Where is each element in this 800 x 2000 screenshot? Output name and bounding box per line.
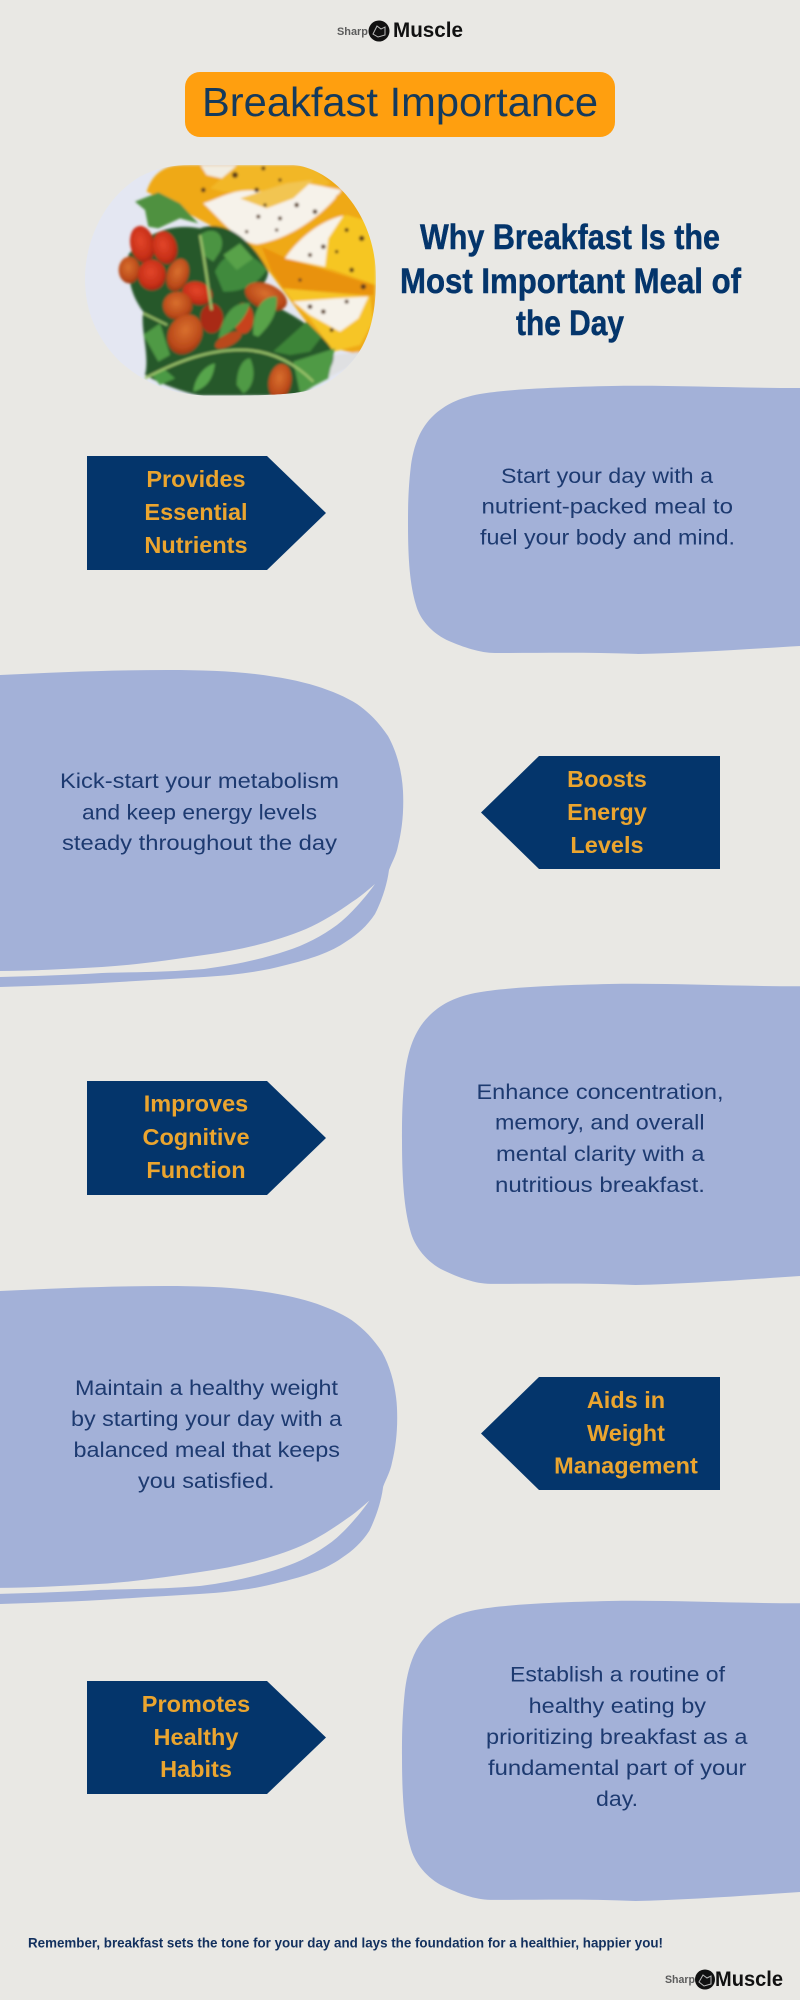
panel: improves cognitive function text: mental clarity with a xyxy=(496,1143,705,1166)
arrow: aids in weight management: Aids in xyxy=(587,1387,665,1413)
panel: aids in weight management text: by starting your day with a xyxy=(71,1408,342,1431)
panel: aids in weight management text: you satisfied. xyxy=(138,1470,274,1493)
arrow: promotes healthy habits: Healthy xyxy=(154,1724,238,1750)
panel: boosts energy levels text: steady throughout the day xyxy=(62,832,338,855)
arrow: provides essential nutrients: Nutrients xyxy=(144,532,248,558)
arrow: improves cognitive function: Improves xyxy=(144,1090,248,1116)
arugula stem xyxy=(145,350,313,382)
panel: boosts energy levels text: and keep energy levels xyxy=(82,802,317,824)
photo: breakfast plate with eggs and salad xyxy=(85,165,376,396)
heading: why breakfast: Why Breakfast Is the xyxy=(420,218,720,257)
logo: top SharpMuscle xyxy=(337,19,463,42)
panel: improves cognitive function text: memory, and overall xyxy=(495,1112,704,1135)
arrow: boosts energy levels: Energy xyxy=(567,799,647,825)
arrow: promotes healthy habits: Habits xyxy=(160,1756,232,1782)
logo: bottom SharpMuscle: Sharp xyxy=(665,1974,695,1986)
logo: top SharpMuscle: Sharp xyxy=(337,26,368,38)
panel: boosts energy levels text: Kick-start your metabolism xyxy=(60,770,339,793)
arrow: aids in weight management: Weight xyxy=(587,1420,665,1446)
arrow: aids in weight management: Management xyxy=(554,1452,698,1478)
logo: top SharpMuscle: Muscle xyxy=(393,19,463,42)
panel: aids in weight management text: balanced meal that keeps xyxy=(74,1439,340,1462)
panel: promotes healthy habits text: Establish a routine of xyxy=(510,1664,725,1687)
panel: promotes healthy habits text xyxy=(402,1601,800,1901)
footer text: Remember, breakfast sets the tone for your day and lays the foundation for a healthier, happier you! xyxy=(28,1934,663,1950)
heading: why breakfast: Most Important Meal of xyxy=(400,262,741,301)
tomatoes xyxy=(128,224,156,264)
arrow: improves cognitive function: Cognitive xyxy=(142,1124,250,1150)
logo: bottom SharpMuscle xyxy=(665,1968,783,1991)
panel: promotes healthy habits text: prioritizing breakfast as a xyxy=(486,1726,748,1749)
arrow: promotes healthy habits xyxy=(87,1681,326,1794)
panel: aids in weight management text: Maintain a healthy weight xyxy=(75,1377,338,1400)
panel: improves cognitive function text: nutritious breakfast. xyxy=(495,1174,705,1197)
panel: provides essential nutrients text: Start your day with a xyxy=(501,465,713,488)
arrow: improves cognitive function: Function xyxy=(146,1157,246,1183)
logo: bottom SharpMuscle: Muscle xyxy=(715,1968,783,1991)
panel: improves cognitive function text: Enhance concentration, xyxy=(476,1081,724,1104)
arrow: promotes healthy habits: Promotes xyxy=(142,1691,250,1717)
pepper specks xyxy=(201,166,366,332)
heading: why breakfast xyxy=(400,218,741,343)
panel: promotes healthy habits text: day. xyxy=(596,1788,638,1811)
greens xyxy=(128,226,334,396)
panel: provides essential nutrients text: fuel your body and mind. xyxy=(480,526,735,550)
arrow: provides essential nutrients xyxy=(87,456,326,570)
arrow: aids in weight management xyxy=(481,1377,720,1490)
arrow: improves cognitive function xyxy=(87,1081,326,1195)
panel: boosts energy levels text xyxy=(0,670,403,987)
panel: promotes healthy habits text: fundamental part of your xyxy=(488,1757,747,1780)
panel: provides essential nutrients text: nutrient-packed meal to xyxy=(482,496,733,518)
arrow: boosts energy levels: Levels xyxy=(570,832,644,858)
leaves over tomatoes xyxy=(253,297,277,337)
panel: promotes healthy habits text: healthy eating by xyxy=(529,1695,707,1718)
arrow: provides essential nutrients: Provides xyxy=(146,466,246,492)
panel: aids in weight management text xyxy=(0,1286,397,1604)
heading: why breakfast: the Day xyxy=(516,304,624,343)
arrow: boosts energy levels xyxy=(481,756,720,869)
arrow: boosts energy levels: Boosts xyxy=(567,766,647,792)
title banner xyxy=(185,72,615,137)
panel: improves cognitive function text xyxy=(402,984,800,1285)
arrow: provides essential nutrients: Essential xyxy=(144,499,248,525)
title banner: Breakfast Importance xyxy=(202,79,598,125)
panel: provides essential nutrients text xyxy=(408,386,800,654)
